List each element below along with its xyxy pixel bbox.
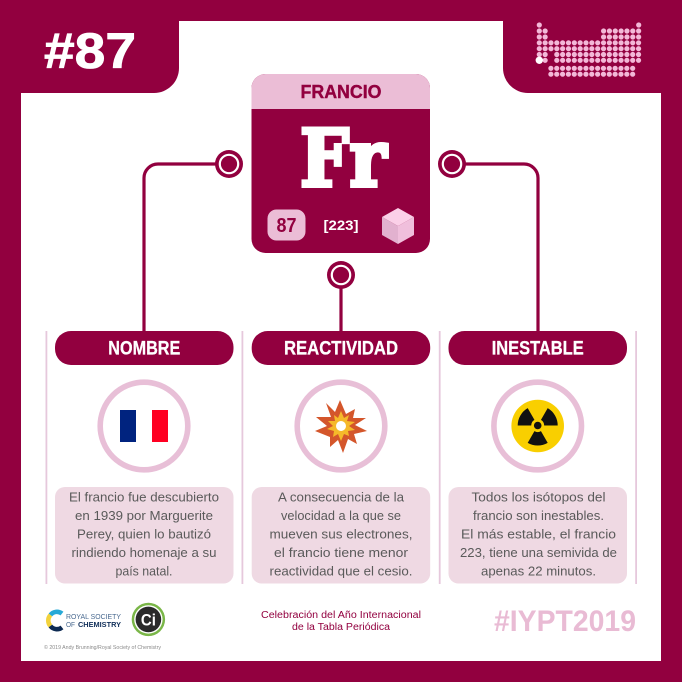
heading pill: inestable bbox=[448, 331, 627, 365]
heading pill: inestable: INESTABLE bbox=[492, 338, 584, 360]
logo wordmark: ROYAL SOCIETY bbox=[66, 612, 121, 621]
element symbol: F bbox=[300, 112, 349, 205]
atomic number badge bbox=[268, 210, 306, 240]
connector node: left bbox=[215, 150, 243, 178]
text box: inestable: El más estable, el francio bbox=[461, 528, 616, 542]
icon: periodic table locator bbox=[536, 25, 640, 74]
text box: inestable: francio son inestables. bbox=[473, 509, 604, 523]
logo: Compound Interest: Ci bbox=[141, 610, 156, 630]
connector: left bbox=[144, 164, 229, 331]
logo wordmark: CHEMISTRY bbox=[78, 620, 121, 629]
element card bbox=[252, 74, 430, 253]
footer caption: de la Tabla Periódica bbox=[292, 622, 390, 633]
text box: nombre: El francio fue descubierto bbox=[69, 490, 219, 504]
card header bbox=[252, 74, 430, 109]
connector: right bbox=[452, 164, 538, 331]
heading pill: nombre: NOMBRE bbox=[108, 338, 180, 360]
copyright: © 2019 Andy Brunning/Royal Society of Chemistry bbox=[44, 644, 161, 651]
logo wordmark: OF bbox=[66, 620, 75, 629]
text box: inestable: 223, tiene una semivida de bbox=[460, 546, 617, 560]
text box: inestable: apenas 22 minutos. bbox=[481, 564, 596, 578]
text box: reactividad: el francio tiene menor bbox=[274, 546, 408, 560]
icon: French flag bbox=[100, 382, 188, 470]
panel: reactividad bbox=[252, 331, 430, 584]
heading pill: reactividad: REACTIVIDAD bbox=[284, 338, 398, 360]
element name: FRANCIO bbox=[300, 81, 382, 102]
text box: nombre: en 1939 por Marguerite bbox=[75, 509, 213, 523]
element number title: #87 bbox=[44, 23, 136, 79]
hashtag: #IYPT2019 bbox=[494, 605, 636, 638]
text box: reactividad: velocidad a la que se bbox=[281, 509, 401, 523]
heading pill: nombre bbox=[55, 331, 234, 365]
text box: nombre: rindiendo homenaje a su bbox=[72, 546, 217, 560]
text box: inestable: Todos los isótopos del bbox=[472, 490, 606, 504]
card body bbox=[252, 74, 430, 253]
atomic number badge: 87 bbox=[276, 215, 296, 237]
connector node: right bbox=[438, 150, 466, 178]
panel: inestable bbox=[448, 331, 627, 584]
text box: inestable bbox=[448, 487, 627, 584]
icon: cube bbox=[382, 208, 414, 244]
atomic mass: [223] bbox=[324, 217, 358, 233]
icon: radiation bbox=[494, 382, 582, 470]
text box: reactividad bbox=[252, 487, 430, 584]
connector: centre bbox=[339, 275, 343, 331]
text box: reactividad: mueven sus electrones, bbox=[270, 528, 412, 542]
text box: nombre: país natal. bbox=[116, 564, 172, 578]
column dividers bbox=[46, 331, 637, 584]
element symbol: r bbox=[350, 112, 388, 205]
connector node: centre bbox=[327, 261, 355, 289]
logo: Compound Interest bbox=[132, 603, 165, 636]
text box: nombre: Perey, quien lo bautizó bbox=[77, 528, 211, 542]
footer caption: Celebración del Año Internacional bbox=[261, 610, 421, 621]
panel: nombre bbox=[55, 331, 234, 584]
text box: nombre bbox=[55, 487, 234, 584]
icon: explosion bbox=[297, 382, 385, 470]
heading pill: reactividad bbox=[252, 331, 430, 365]
logo: Royal Society of Chemistry bbox=[48, 612, 121, 629]
text box: reactividad: reactividad que el cesio. bbox=[270, 564, 412, 578]
text box: reactividad: A consecuencia de la bbox=[278, 490, 404, 504]
logo mark bbox=[48, 612, 62, 629]
